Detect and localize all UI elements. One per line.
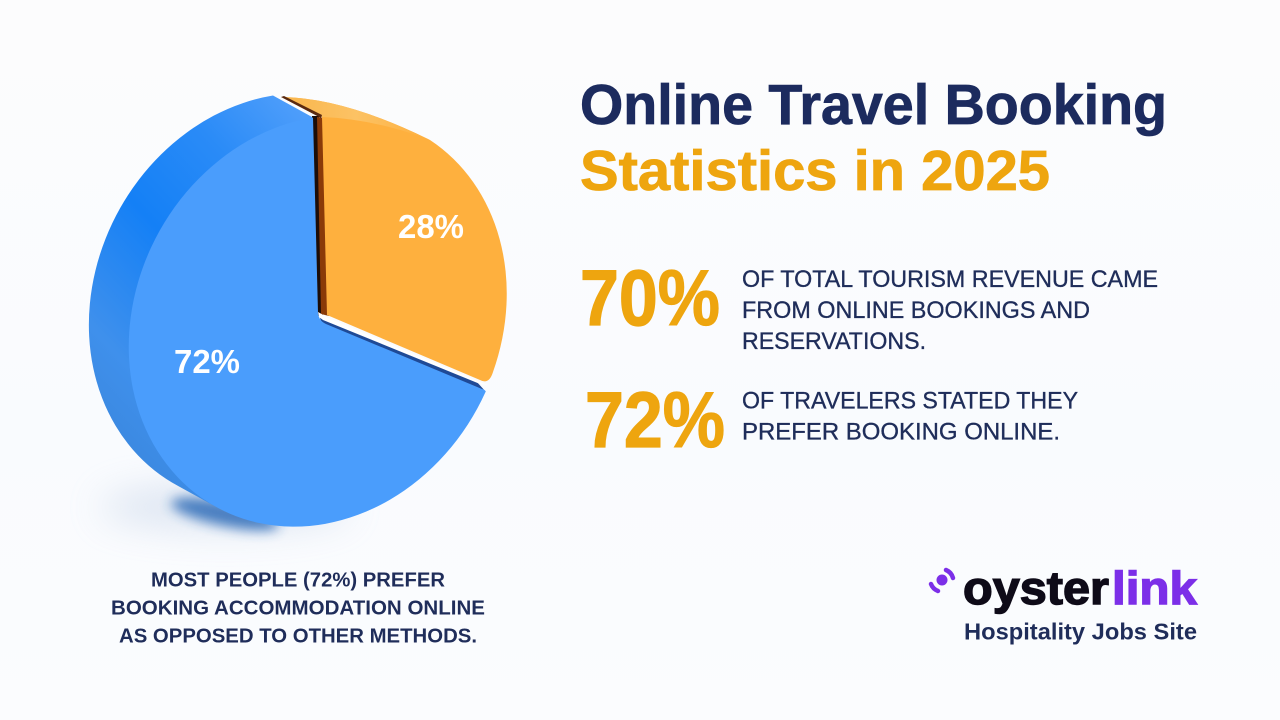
orange slice top bevel	[282, 97, 430, 140]
3D pie chart	[89, 96, 507, 527]
stat: 72% prefer booking online	[585, 375, 1078, 464]
pie caption: BOOKING ACCOMMODATION ONLINE	[111, 596, 485, 620]
stat text: FROM ONLINE BOOKINGS AND	[742, 297, 1090, 324]
blue slice: 72%	[129, 118, 486, 527]
stat text: PREFER BOOKING ONLINE.	[742, 418, 1060, 446]
pie caption	[111, 568, 485, 648]
white sliver	[318, 312, 488, 385]
label: 28%: 28%	[398, 208, 464, 245]
wordmark: link: link	[1112, 562, 1197, 614]
navy gap under orange slice	[320, 316, 486, 392]
orange slice: 28%	[282, 97, 507, 381]
stat: 70% of tourism revenue	[580, 253, 1158, 355]
pie side wall: blue	[89, 96, 318, 508]
logo: oysterlink	[931, 562, 1197, 644]
title	[580, 73, 1167, 203]
pie caption: MOST PEOPLE (72%) PREFER	[151, 568, 445, 592]
title: Statistics in 2025	[580, 139, 1050, 203]
shadow under pie	[100, 485, 350, 537]
stat text	[742, 266, 1158, 355]
stat number 70%: 70%	[580, 253, 720, 342]
pie caption: AS OPPOSED TO OTHER METHODS.	[119, 624, 477, 648]
label: 72%: 72%	[174, 343, 240, 380]
stat text: OF TOTAL TOURISM REVENUE CAME	[742, 266, 1158, 293]
tagline: Hospitality Jobs Site	[964, 618, 1197, 644]
stat text: RESERVATIONS.	[742, 328, 926, 355]
dark edge on orange bevel	[281, 96, 322, 118]
icon: oysterlink mark	[931, 570, 953, 591]
title: Online Travel Booking	[580, 73, 1167, 137]
wordmark: oyster: oyster	[963, 562, 1109, 614]
stat text: OF TRAVELERS STATED THEY	[742, 388, 1078, 414]
stat text	[742, 388, 1078, 446]
stat number 72%: 72%	[585, 375, 725, 464]
dark gap beside orange slice	[312, 116, 323, 316]
